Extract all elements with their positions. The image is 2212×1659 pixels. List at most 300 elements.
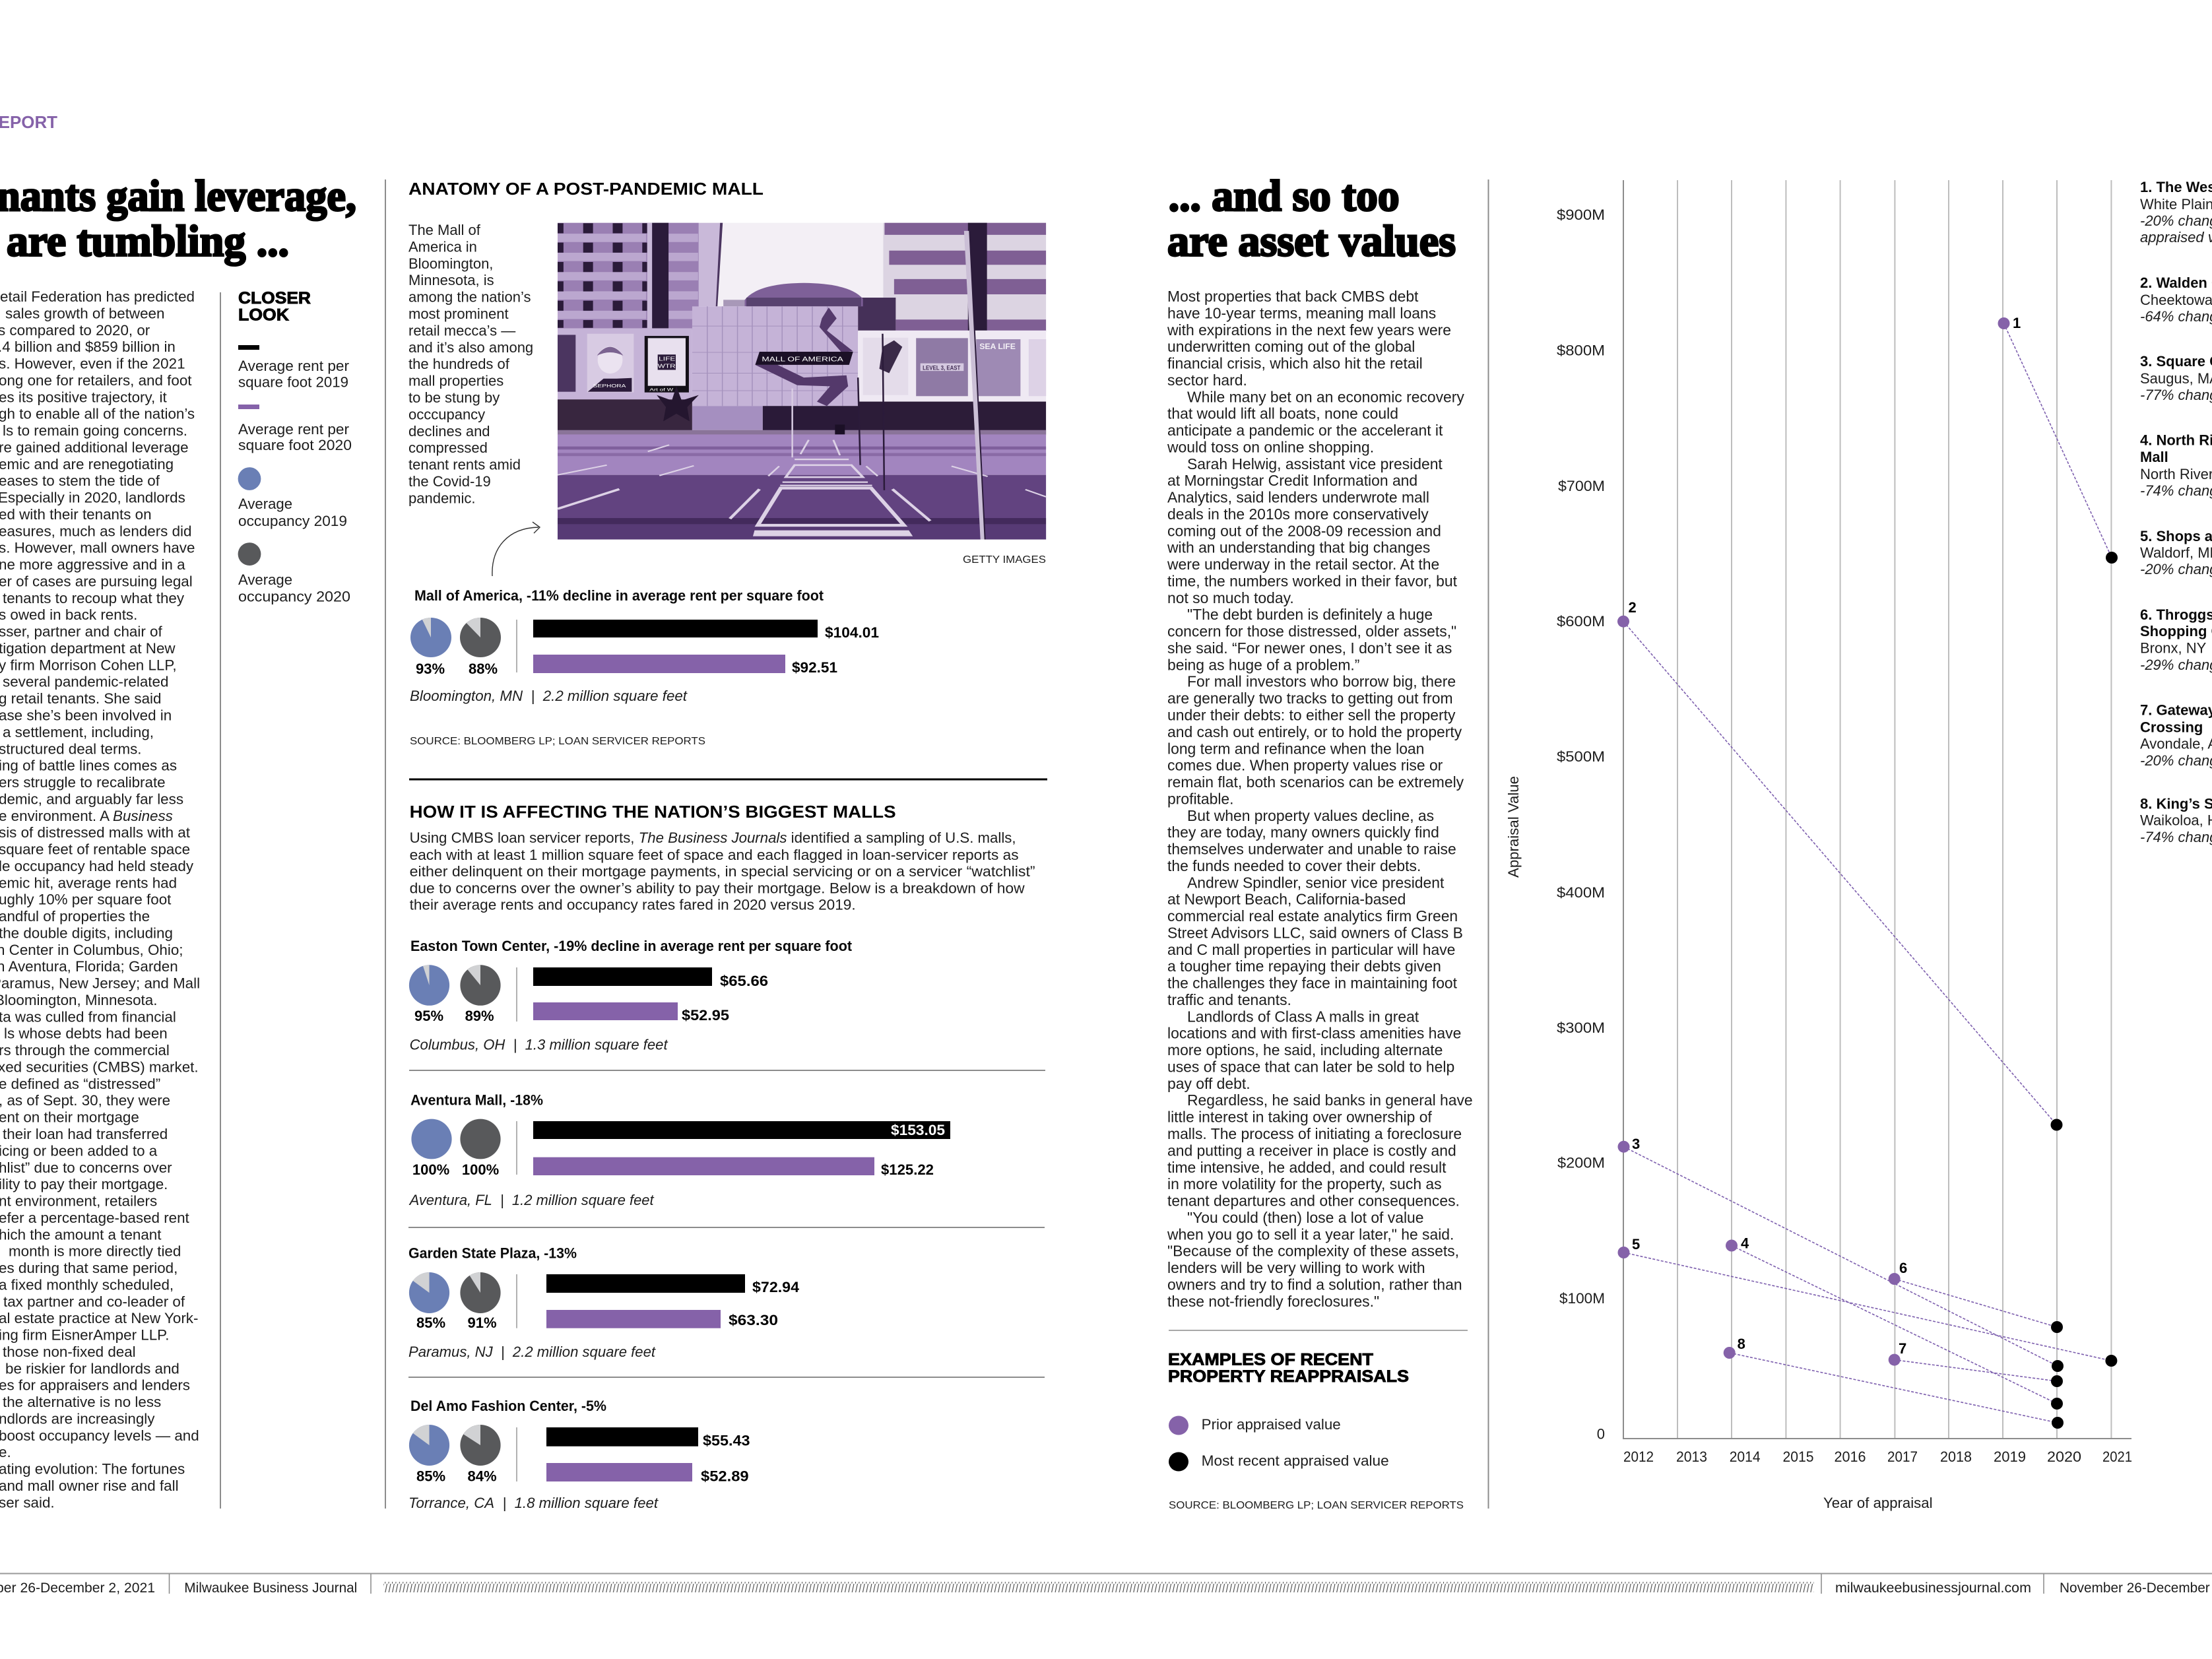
bar: rent 2020: $125.22 xyxy=(881,1161,934,1178)
text block: right article column: at Morningstar Credit Information and xyxy=(1167,472,1417,489)
legend: gray circle 2020 occupancy xyxy=(238,542,350,605)
text block: left article column: tenants to recoup what they xyxy=(3,590,185,606)
list: property reappraisal key xyxy=(2140,179,2212,845)
text block: left article column: n Aventura, Florida; Garden xyxy=(0,958,178,975)
panel: garden state plaza xyxy=(408,1245,800,1360)
text block: right article column: and cash out entirely, or to hold the property xyxy=(1167,723,1462,740)
text block: left article column: hlist” due to concerns over xyxy=(0,1159,172,1176)
headline: and so too are asset values xyxy=(1167,172,1456,265)
text block: left article column: eases to stem the tide of xyxy=(0,472,160,489)
mall title: Garden State Plaza, -13% xyxy=(408,1245,577,1262)
mall title: Aventura Mall, -18% xyxy=(410,1091,543,1109)
text block: right article column: being as huge of a problem.” xyxy=(1167,656,1359,673)
text block: left article column: ta was culled from financial xyxy=(0,1008,176,1025)
point numbers xyxy=(1629,315,2021,1357)
item 8 xyxy=(2140,796,2212,845)
heading: examples of recent property reappraisals: EXAMPLES OF RECENT xyxy=(1168,1350,1373,1369)
y axis labels: $900M xyxy=(1557,207,1605,223)
text block: sampling intro xyxy=(410,830,1035,913)
source: SOURCE: BLOOMBERG LP; LOAN SERVICER REPORTS xyxy=(410,736,705,747)
text block: mall of america intro: among the nation’s xyxy=(408,289,531,306)
text block: right article column: Street Advisors LLC, said owners of Class B xyxy=(1167,924,1463,941)
bar: rent 2020 xyxy=(533,1002,729,1024)
text block: left article column: square feet of rentable space xyxy=(0,841,190,858)
text block: right article column: sector hard. xyxy=(1167,372,1247,389)
text block: left article column: ers struggle to recalibrate xyxy=(0,774,166,791)
text block: left article column: es during that same period, xyxy=(0,1260,178,1276)
text block: right article column: comes due. When property values rise or xyxy=(1167,757,1443,774)
photo: mall of america duotone illustration: MALL OF AMERICA xyxy=(762,356,843,363)
x axis labels: 2019 xyxy=(1994,1448,2026,1465)
text block: left article column: y firm Morrison Cohen LLP, xyxy=(0,657,177,673)
occupancy labels xyxy=(412,1161,499,1178)
pie: occupancy 2020 84% xyxy=(460,1425,501,1466)
text block: right article column: themselves underwater and unable to raise xyxy=(1167,841,1456,858)
photo: mall of america duotone illustration: Art of W xyxy=(649,387,673,392)
y axis labels: $400M xyxy=(1557,884,1605,901)
text block: left article column: etail Federation has predicted xyxy=(0,288,195,305)
occupancy labels: 100% xyxy=(412,1161,449,1178)
item 7: Crossing xyxy=(2140,719,2203,735)
text block: mall of america intro: mall properties xyxy=(408,373,504,389)
text block: mall of america intro: Minnesota, is xyxy=(408,272,494,288)
text block: sampling intro: Using CMBS loan servicer reports, The Business Journals identified a sampling of U.S. malls, xyxy=(410,830,1016,846)
text block: left article column: n Center in Columbus, Ohio; xyxy=(0,942,183,958)
bar: rent 2019 xyxy=(546,1274,800,1295)
pie: occupancy 2020 89% xyxy=(460,965,501,1006)
occupancy labels xyxy=(414,1008,494,1024)
text block: left article column: demic, and arguably far less xyxy=(0,791,183,807)
text block: right article column: the funds needed to cover their debts. xyxy=(1167,857,1421,874)
text block: mall of america intro: the hundreds of xyxy=(408,356,510,372)
text block: right article column: at Newport Beach, California-based xyxy=(1167,891,1406,908)
occupancy labels xyxy=(416,1315,497,1331)
gridlines xyxy=(1677,180,2111,1439)
bar: rent 2020 xyxy=(533,655,837,676)
text block: right article column: and C mall properties in particular will have xyxy=(1167,941,1455,958)
y axis labels: $200M xyxy=(1557,1155,1605,1171)
headline: tenants gain leverage: nants gain leverage, xyxy=(0,172,356,220)
text block: left article column: ing firm EisnerAmper LLP. xyxy=(0,1327,169,1344)
text block: right article column: Sarah Helwig, assistant vice president xyxy=(1187,455,1443,472)
heading: anatomy of a post-pandemic mall: ANATOMY OF A POST-PANDEMIC MALL xyxy=(408,179,764,199)
legend: black bar 2019 rent xyxy=(238,345,349,390)
location: Paramus, NJ | 2.2 million square feet xyxy=(408,1344,656,1360)
text block: right article column: "The debt burden is definitely a huge xyxy=(1187,606,1433,623)
text block: left article column: rs through the commercial xyxy=(0,1042,170,1058)
text block: right article column: the challenges they face in maintaining foot xyxy=(1167,975,1458,992)
text block: left article column: al estate practice at New York- xyxy=(0,1310,198,1326)
bar: rent 2019 xyxy=(533,1121,950,1139)
text block: right article column: these not-friendly foreclosures." xyxy=(1167,1293,1379,1310)
text block: left article column: ls to remain going concerns. xyxy=(3,422,187,439)
photo: mall of america duotone illustration: LEVEL 3, EAST xyxy=(923,364,961,372)
footer: page folio strip: milwaukeebusinessjournal.com xyxy=(1835,1580,2031,1596)
connector lines xyxy=(1623,323,2112,1423)
legend: gray circle 2020 occupancy: Average xyxy=(238,571,292,588)
heading: how it is affecting: HOW IT IS AFFECTING THE NATION’S BIGGEST MALLS xyxy=(410,802,896,822)
bar: rent 2020 xyxy=(546,1463,749,1485)
text block: left article column: structured deal terms. xyxy=(0,740,142,757)
headline: and so too are asset values: ... and so too xyxy=(1169,172,1400,220)
heading: closer look: LOOK xyxy=(238,306,289,325)
point numbers: 1 xyxy=(2013,315,2021,331)
text block: left article column: easures, much as lenders did xyxy=(0,523,191,539)
text block: right article column: For mall investors who borrow big, there xyxy=(1187,673,1456,690)
text block: right article column: Most properties that back CMBS debt xyxy=(1167,288,1419,305)
text block: left article column: er of cases are pursuing legal xyxy=(0,573,193,589)
text block: left article column: ughly 10% per square foot xyxy=(0,892,172,908)
bar: rent 2020: $63.30 xyxy=(729,1312,778,1328)
legend: most recent appraised value: Most recent appraised value xyxy=(1202,1452,1389,1469)
text block: right article column: under their debts: to either sell the property xyxy=(1167,706,1456,723)
text block: left article column: efer a percentage-based rent xyxy=(0,1210,190,1226)
legend: prior appraised value: Prior appraised value xyxy=(1202,1416,1341,1433)
text block: mall of america intro: to be stung by xyxy=(408,389,500,406)
text block: left article column: s owed in back rents. xyxy=(0,606,137,623)
legend: blue circle 2019 occupancy: Average xyxy=(238,496,292,512)
item 3 xyxy=(2140,353,2212,403)
bar: rent 2019: $104.01 xyxy=(825,624,879,641)
bar: rent 2020: $52.95 xyxy=(682,1007,729,1024)
text block: right article column: were underway in the retail sector. At the xyxy=(1167,556,1439,573)
pie: occupancy 2020 91% xyxy=(460,1272,501,1313)
text block: left article column: ser said. xyxy=(0,1494,55,1511)
text block: right article column: are generally two tracks to getting out from xyxy=(1167,690,1453,707)
text block: left article column: e defined as “distressed” xyxy=(0,1076,160,1092)
mall title: Mall of America, -11% decline in average rent per square foot xyxy=(414,587,824,604)
y axis labels: $700M xyxy=(1558,478,1605,494)
text block: right article column: underwritten coming out of the global xyxy=(1167,338,1415,355)
panel: aventura mall xyxy=(408,1091,950,1208)
text block: right article column: But when property values decline, as xyxy=(1187,807,1434,824)
panel: easton town center xyxy=(409,938,853,1053)
text block: right article column: with expirations in the next few years were xyxy=(1167,321,1451,339)
legend: black bar 2019 rent: Average rent per xyxy=(238,358,349,374)
occupancy labels: 89% xyxy=(465,1008,494,1024)
bar: rent 2020 xyxy=(546,1310,778,1328)
text block: right article column: While many bet on an economic recovery xyxy=(1187,388,1464,405)
text block: left article column: s. However, even if the 2021 xyxy=(0,356,185,372)
text block: right article column: malls. The process of initiating a foreclosure xyxy=(1167,1125,1462,1142)
text block: right article column: Andrew Spindler, senior vice president xyxy=(1187,874,1445,891)
pie: occupancy 2020 100% xyxy=(460,1119,501,1159)
text block: left article column: the double digits, including xyxy=(0,925,173,941)
text block: left article column: ing of battle lines comes as xyxy=(0,758,177,774)
panel: mall of america stats xyxy=(410,587,879,747)
item 1 xyxy=(2140,179,2212,245)
occupancy labels: 100% xyxy=(462,1161,499,1178)
occupancy labels: 85% xyxy=(416,1468,445,1485)
text block: right article column: profitable. xyxy=(1167,790,1234,807)
text block: right article column: Regardless, he said banks in general have xyxy=(1187,1091,1473,1109)
photo: mall of america duotone illustration: SEA LIFE xyxy=(979,342,1016,351)
headline: tenants gain leverage xyxy=(0,172,356,265)
text block: left article column: s. However, mall owners have xyxy=(0,540,195,556)
text block: left article column: a settlement, including, xyxy=(3,724,154,740)
text block: right article column: commercial real estate analytics firm Green xyxy=(1167,907,1458,925)
text block: right article column: deals in the 2010s more conservatively xyxy=(1167,505,1429,523)
text block: left article column: ndlords are increasingly xyxy=(0,1410,155,1427)
text block: left article column: ne more aggressive and in a xyxy=(0,556,185,573)
text block: left article column: ong one for retailers, and foot xyxy=(0,372,192,389)
text block: left article column: hich the amount a tenant xyxy=(0,1226,162,1243)
text block: right article column: pay off debt. xyxy=(1167,1075,1251,1092)
heading: closer look: CLOSER xyxy=(238,289,311,308)
text block: mall of america intro: tenant rents amid xyxy=(408,457,521,473)
text block: left article column: ility to pay their mortgage. xyxy=(0,1176,168,1192)
y axis labels: 0 xyxy=(1597,1426,1605,1443)
pie: occupancy 2020 88% xyxy=(460,618,501,657)
axes xyxy=(1623,180,2131,1439)
bar: rent 2020: $92.51 xyxy=(792,659,837,676)
item 6 xyxy=(2140,606,2212,673)
legend: black bar 2019 rent: square foot 2019 xyxy=(238,374,348,390)
headline: tenants gain leverage: are tumbling ... xyxy=(7,216,289,265)
text block: left article column: le occupancy had held steady xyxy=(0,858,194,874)
text block: right article column: with an understanding that big changes xyxy=(1167,539,1430,556)
item 4: Mall xyxy=(2140,449,2168,465)
text block: left article column: sis of distressed malls with at xyxy=(0,824,191,841)
legend: blue circle 2019 occupancy xyxy=(238,467,347,529)
x axis labels: 2012 xyxy=(1623,1448,1654,1465)
occupancy labels: 91% xyxy=(467,1315,497,1331)
text block: left article column: g retail tenants. She said xyxy=(0,690,161,707)
x axis title: Year of appraisal xyxy=(1823,1495,1932,1511)
footer: page folio strip: ber 26-December 2, 2021 xyxy=(0,1580,155,1596)
bar: rent 2019 xyxy=(533,620,879,641)
y axis labels xyxy=(1557,207,1605,1443)
legend: purple bar 2020 rent xyxy=(238,405,352,453)
text block: right article column: Analytics, said lenders underwrote mall xyxy=(1167,489,1429,506)
photo: mall of america duotone illustration: SEPHORA xyxy=(593,383,626,389)
headline: and so too are asset values: are asset values xyxy=(1167,216,1456,265)
legend: prior appraised value xyxy=(1169,1416,1341,1435)
text block: left article column: ase she’s been involved in xyxy=(0,707,172,723)
x axis labels: 2014 xyxy=(1730,1448,1761,1465)
text block: left article column: nt environment, retailers xyxy=(0,1193,157,1210)
text block: left article column: the alternative is no less xyxy=(3,1394,161,1410)
text block: left article column: tigation department at New xyxy=(0,640,176,657)
text block: right article column: "Because of the complexity of these assets, xyxy=(1167,1243,1459,1260)
text block: mall of america intro: retail mecca’s — xyxy=(408,322,515,339)
occupancy labels xyxy=(416,661,498,677)
item 2 xyxy=(2140,275,2212,325)
text block: left article column: Especially in 2020, landlords xyxy=(0,490,185,506)
x axis labels: 2013 xyxy=(1676,1448,1707,1465)
point numbers: 2 xyxy=(1629,599,1637,616)
text block: mall of america intro: the Covid-19 xyxy=(408,473,491,490)
x axis labels xyxy=(1623,1448,2132,1465)
item 5 xyxy=(2140,528,2212,577)
text block: mall of america intro: declines and xyxy=(408,423,490,439)
text block: left article column: e environment. A Business xyxy=(0,808,173,824)
text block: right article column: remain flat, both scenarios can be extremely xyxy=(1167,773,1464,791)
y axis title: Appraisal Value xyxy=(1505,776,1522,878)
text block: left article column: be riskier for landlords and xyxy=(5,1360,179,1377)
y axis labels: $300M xyxy=(1557,1020,1605,1036)
pie: occupancy 2019 85% xyxy=(409,1425,449,1466)
text block: right article column: "You could (then) lose a lot of value xyxy=(1187,1209,1424,1226)
text block: sampling intro: due to concerns over the owner’s ability to pay their mortgage. Below is a breakdown of how xyxy=(410,880,1025,897)
text block: left article column: several pandemic-related xyxy=(3,674,168,690)
text block: right article column: a tougher time repaying their debts given xyxy=(1167,958,1441,975)
item 7 xyxy=(2140,702,2212,769)
text block: mall of america intro: compressed xyxy=(408,439,488,456)
point numbers: 3 xyxy=(1632,1136,1640,1152)
bar: rent 2019 xyxy=(546,1427,750,1449)
occupancy labels: 85% xyxy=(416,1315,445,1331)
text block: left article column: es for appraisers and lenders xyxy=(0,1377,190,1394)
text block: left article column: gh to enable all of the nation’s xyxy=(0,406,195,422)
x axis labels: 2015 xyxy=(1783,1448,1813,1465)
point numbers: 7 xyxy=(1899,1340,1906,1357)
text block: left article column: boost occupancy levels — and xyxy=(0,1427,199,1444)
recent value points xyxy=(2051,552,2118,1429)
legend: blue circle 2019 occupancy: occupancy 2019 xyxy=(238,513,347,529)
text block: right article column: owners and try to find a solution, rather than xyxy=(1167,1276,1462,1293)
text block: right article column: not so much today. xyxy=(1167,589,1294,606)
chart: appraisal values slope chart xyxy=(1505,180,2132,1511)
panel: closer look legend xyxy=(238,289,352,605)
location: Columbus, OH | 1.3 million square feet xyxy=(410,1037,668,1053)
point numbers: 8 xyxy=(1738,1336,1745,1352)
text block: right article column: they are today, many owners quickly find xyxy=(1167,824,1439,841)
text block: mall of america intro: most prominent xyxy=(408,306,509,322)
text block: right article column: locations and with first-class amenities have xyxy=(1167,1025,1461,1042)
x axis labels: 2018 xyxy=(1940,1448,1972,1465)
legend: purple bar 2020 rent: square foot 2020 xyxy=(238,437,352,453)
prior value points xyxy=(1617,317,2010,1366)
text block: right article column: and putting a receiver in place is costly and xyxy=(1167,1142,1456,1159)
occupancy labels: 88% xyxy=(469,661,498,677)
legend: gray circle 2020 occupancy: occupancy 2020 xyxy=(238,589,350,605)
occupancy labels: 95% xyxy=(414,1008,443,1024)
pie: occupancy 2019 85% xyxy=(409,1272,449,1313)
y axis labels: $600M xyxy=(1557,613,1605,630)
footer: page folio strip: Milwaukee Business Journal xyxy=(184,1580,357,1596)
text block: left article column: those non-fixed deal xyxy=(3,1344,136,1360)
occupancy labels xyxy=(416,1468,497,1485)
text block: right article column: tenant departures and other consequences. xyxy=(1167,1192,1460,1210)
y axis labels: $100M xyxy=(1559,1290,1605,1307)
text block: right article column: financial crisis, which also hit the retail xyxy=(1167,355,1423,372)
text block: left article column: , as of Sept. 30, they were xyxy=(0,1092,170,1109)
text block: right article column: would toss on online shopping. xyxy=(1167,438,1374,455)
bar: rent 2019 xyxy=(533,967,768,989)
occupancy labels: 84% xyxy=(467,1468,497,1485)
text block: mall of america intro: occcupancy xyxy=(408,406,485,422)
panel: del amo fashion center xyxy=(408,1398,750,1511)
photo credit: GETTY IMAGES xyxy=(963,554,1046,566)
source note: SOURCE: BLOOMBERG LP; LOAN SERVICER REPORTS xyxy=(1169,1500,1464,1511)
heading: closer look xyxy=(238,289,311,325)
point numbers: 5 xyxy=(1632,1236,1640,1252)
occupancy labels: 93% xyxy=(416,661,445,677)
text block: right article column: she said. “For newer ones, I don’t see it as xyxy=(1167,639,1452,657)
text block: sampling intro: each with at least 1 million square feet of space and each flagged in loan-servicer reports as xyxy=(410,847,1019,863)
x axis labels: 2017 xyxy=(1887,1448,1918,1465)
x axis labels: 2020 xyxy=(2047,1448,2081,1465)
text block: mall of america intro: America in xyxy=(408,238,477,255)
text block: right article column: when you go to sell it a year later," he said. xyxy=(1167,1225,1454,1243)
pie: occupancy 2019 95% xyxy=(409,965,449,1006)
text block: left article column: sser, partner and chair of xyxy=(0,624,162,640)
text block: left article column: their loan had transferred xyxy=(3,1126,168,1142)
footer: page folio strip xyxy=(0,1573,2212,1596)
text block: left article column: ent on their mortgage xyxy=(0,1109,139,1126)
text block: left article column: andful of properties the xyxy=(0,908,150,925)
heading: examples of recent property reappraisals: PROPERTY REAPPRAISALS xyxy=(1168,1367,1409,1386)
x axis labels: 2021 xyxy=(2102,1448,2132,1465)
mall title: Del Amo Fashion Center, -5% xyxy=(410,1398,606,1414)
photo: mall of america duotone illustration: WTR xyxy=(658,364,676,370)
text block: left article column: month is more directly tied xyxy=(9,1243,181,1260)
item 6: Bronx, NY xyxy=(2140,640,2207,656)
x axis labels: 2016 xyxy=(1835,1448,1866,1465)
text block: sampling intro: their average rents and occupancy rates fared in 2020 versus 2019. xyxy=(410,897,856,913)
text block: right article column: more options, he said, including alternate xyxy=(1167,1041,1443,1058)
text block: right article column: time intensive, he added, and could result xyxy=(1167,1159,1447,1176)
text block: mall of america intro: and it’s also among xyxy=(408,339,533,356)
location: Aventura, FL | 1.2 million square feet xyxy=(408,1192,654,1208)
heading: examples of recent property reappraisals xyxy=(1168,1350,1409,1386)
text block: right article column: long term and refinance when the loan xyxy=(1167,740,1424,757)
arrow: caption to photo xyxy=(492,522,540,576)
point numbers: 4 xyxy=(1741,1235,1749,1251)
text block: left article column: xed securities (CMBS) market. xyxy=(0,1058,199,1075)
text block: left article column: s compared to 2020, or xyxy=(0,322,150,339)
text block: left article column: emic and are renegotiating xyxy=(0,456,174,472)
pie: occupancy 2019 93% xyxy=(410,618,451,657)
legend: purple bar 2020 rent: Average rent per xyxy=(238,421,349,438)
text block: right article column: little interest in taking over ownership of xyxy=(1167,1109,1432,1126)
text block: left article column: and mall owner rise and fall xyxy=(0,1478,179,1494)
text block: right article column: uses of space that can later be sold to help xyxy=(1167,1058,1454,1075)
text block: left article column: .4 billion and $859 billion in xyxy=(0,339,176,355)
text block: left article column: sales growth of between xyxy=(5,305,164,321)
photo: mall of america duotone illustration xyxy=(558,223,1049,540)
text block: right article column: time, the numbers worked in their favor, but xyxy=(1167,572,1458,589)
pie: occupancy 2019 100% xyxy=(411,1119,452,1159)
text block: right article column: have 10-year terms, meaning mall loans xyxy=(1167,304,1436,321)
text block: left article column: es its positive trajectory, it xyxy=(0,389,167,405)
text block: right article column: that would lift all boats, none could xyxy=(1167,405,1398,422)
text block: right article column: traffic and tenants. xyxy=(1167,991,1291,1008)
text block: left article column: ed with their tenants on xyxy=(0,506,152,523)
text block: left article column: ating evolution: The fortunes xyxy=(0,1461,185,1478)
text block: left article column: icing or been added to a xyxy=(0,1142,158,1159)
bar: rent 2020 xyxy=(533,1157,934,1178)
text block: left article column: re gained additional leverage xyxy=(0,439,189,455)
y axis labels: $800M xyxy=(1557,342,1605,359)
text block: right article column: concern for those distressed, older assets," xyxy=(1167,623,1456,640)
text block: right article column: coming out of the 2008-09 recession and xyxy=(1167,522,1441,539)
location: Bloomington, MN | 2.2 million square feet xyxy=(410,688,688,704)
text block: left article column: tax partner and co-leader of xyxy=(3,1293,185,1310)
bar: rent 2019: $65.66 xyxy=(720,973,768,989)
text block: right article column: lenders will be very willing to work with xyxy=(1167,1259,1425,1276)
item 4 xyxy=(2140,432,2212,499)
text block: left article column: a fixed monthly scheduled, xyxy=(0,1276,174,1293)
text block: left article column: emic hit, average rents had xyxy=(0,874,177,891)
text block: right article column: in more volatility for the property, such as xyxy=(1167,1175,1442,1192)
text block: mall of america intro: pandemic. xyxy=(408,490,476,506)
text block: right article column: Landlords of Class A malls in great xyxy=(1187,1008,1419,1025)
bar: rent 2019: $153.05 xyxy=(891,1122,945,1138)
bar: rent 2020: $52.89 xyxy=(701,1468,749,1485)
text block: left article column: ls whose debts had been xyxy=(4,1025,168,1042)
